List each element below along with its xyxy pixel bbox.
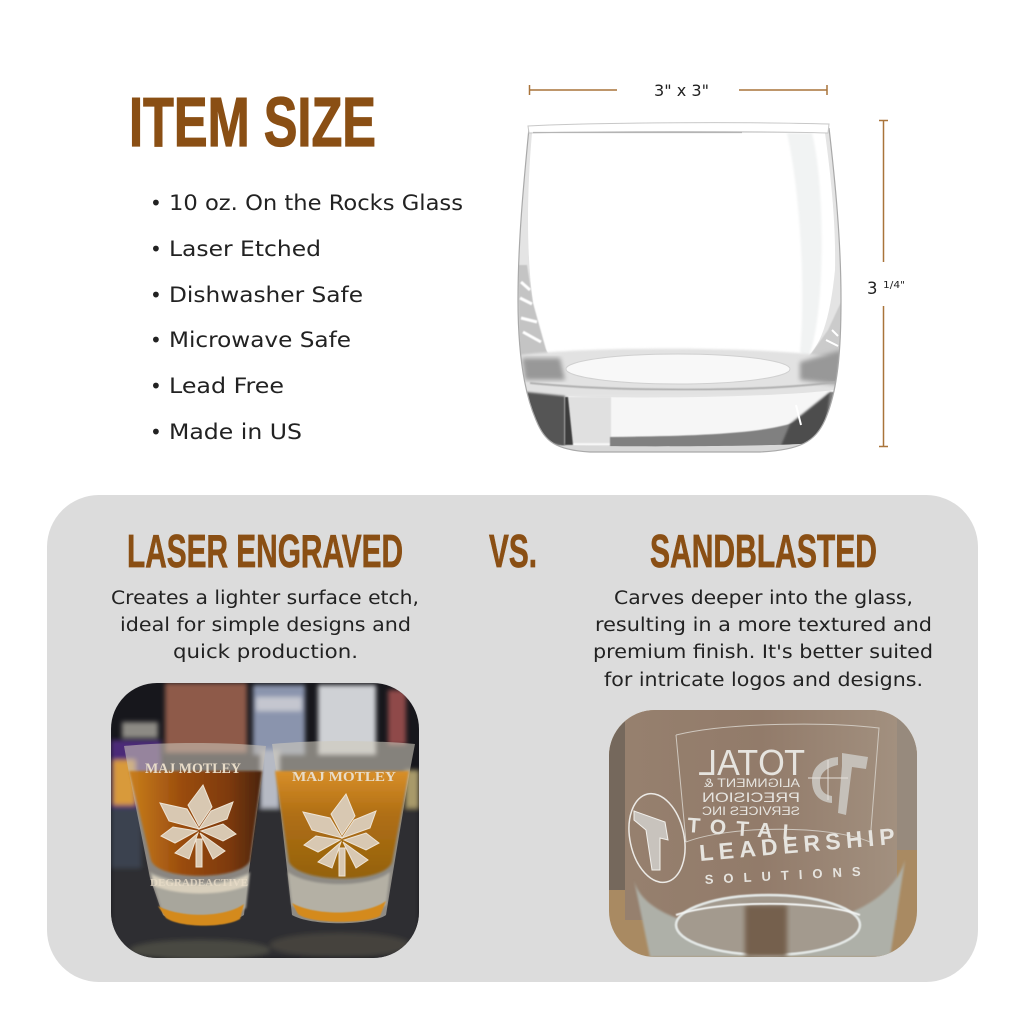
text block: sandblasted description: resulting in a more textured and xyxy=(595,615,932,636)
feature list: Microwave Safe xyxy=(169,328,351,353)
height dimension: 3 1/4 xyxy=(867,120,905,446)
text block: sandblasted description: for intricate logos and designs. xyxy=(604,670,923,691)
mirrored etched logo on far side: SERVICES INC xyxy=(702,806,800,818)
panel: laser engraved vs sandblasted xyxy=(47,495,978,982)
text block: laser engraved description: Creates a lighter surface etch, xyxy=(111,588,419,609)
height dimension: 3 1/4: 1/4" xyxy=(883,280,905,291)
etched text: total leadership solutions: TOTAL xyxy=(687,814,796,845)
left shot glass: DEGRADEACTIVE xyxy=(150,877,248,889)
text block: laser engraved description xyxy=(111,588,419,663)
feature list xyxy=(150,191,463,445)
feature list: 10 oz. On the Rocks Glass xyxy=(169,191,463,216)
feature list: • xyxy=(150,283,162,307)
heading: laser engraved: LASER ENGRAVED xyxy=(127,525,403,577)
mirrored etched logo on far side: PRECISION xyxy=(702,789,800,805)
glass photo xyxy=(518,123,842,456)
feature list: Made in US xyxy=(169,420,302,445)
feature list: • xyxy=(150,328,162,352)
left shot glass xyxy=(124,743,266,926)
text block: sandblasted description: premium finish. It's better suited xyxy=(593,642,933,663)
feature list: • xyxy=(150,237,162,261)
feature list: Dishwasher Safe xyxy=(169,283,363,308)
heading: vs: VS. xyxy=(489,525,537,577)
feature list: • xyxy=(150,191,162,215)
photo: laser engraved shot glasses xyxy=(111,683,419,960)
text block: sandblasted description xyxy=(593,588,933,691)
mirrored etched logo on far side xyxy=(676,724,879,842)
feature list: • xyxy=(150,420,162,444)
photo: sandblasted glass xyxy=(609,710,917,957)
height dimension: 3 1/4: 3 xyxy=(867,279,878,298)
title: item size: ITEM SIZE xyxy=(129,83,376,161)
right shot glass xyxy=(272,741,415,923)
etched text: total leadership solutions: SOLUTIONS xyxy=(704,864,861,887)
width dimension: 3 x 3: 3" x 3" xyxy=(654,81,709,100)
mirrored etched logo on far side: ALIGNMENT & xyxy=(704,776,800,790)
text block: laser engraved description: ideal for simple designs and xyxy=(120,615,411,636)
heading: sandblasted: SANDBLASTED xyxy=(650,525,877,577)
feature list: Laser Etched xyxy=(169,237,321,262)
etched text: total leadership solutions xyxy=(688,818,894,884)
width dimension: 3 x 3 xyxy=(529,81,827,100)
left shot glass: MAJ MOTLEY xyxy=(145,761,241,777)
text block: sandblasted description: Carves deeper into the glass, xyxy=(614,588,913,609)
text block: laser engraved description: quick production. xyxy=(173,642,358,663)
right glass oak leaf etching xyxy=(303,794,379,876)
glass body xyxy=(634,860,905,957)
feature list: • xyxy=(150,374,162,398)
etched text: total leadership solutions: LEADERSHIP xyxy=(698,823,896,866)
left glass oak leaf etching xyxy=(160,785,236,867)
feature list: Lead Free xyxy=(169,374,284,399)
mirrored etched logo on far side: TOTAL xyxy=(698,742,805,783)
etched logo: T in circle xyxy=(628,792,686,884)
right shot glass: MAJ MOTLEY xyxy=(292,770,396,785)
